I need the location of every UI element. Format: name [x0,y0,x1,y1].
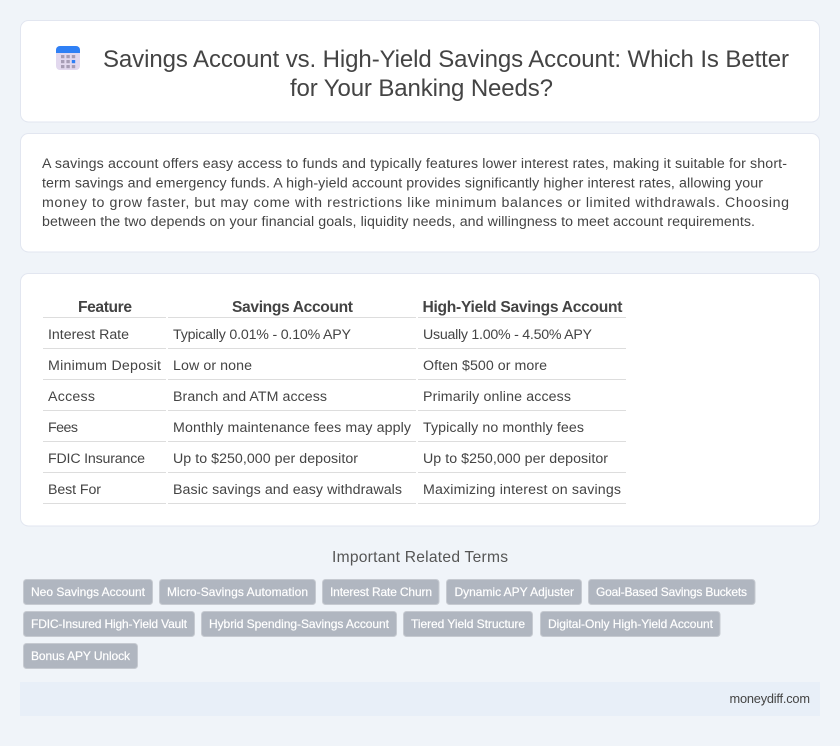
text block: intro paragraph: between the two depends on your financial goals, liquidity needs, and willingness to meet account requirements. [42,214,755,230]
row: FDIC insurance [48,451,608,467]
row: fees [48,420,584,436]
table header: Savings Account [232,299,353,316]
row: fees: Fees [48,420,78,436]
row: access: Primarily online access [423,389,571,405]
tag [24,580,152,604]
tag [24,644,138,668]
row: FDIC insurance: Up to $250,000 per depositor [423,451,608,467]
table header: High-Yield Savings Account [422,299,622,316]
footer [20,682,820,716]
row: access: Branch and ATM access [173,389,327,405]
tag [160,580,316,604]
row: fees: Monthly maintenance fees may apply [173,420,412,436]
heading: important related terms: Important Related Terms [332,549,508,566]
row: interest rate: Interest Rate [48,327,129,343]
tag [588,580,755,604]
title [103,46,789,102]
row: minimum deposit: Low or none [173,358,252,374]
tag [24,612,194,636]
tag: FDIC-Insured High-Yield Vault [31,617,188,631]
title: Savings Account vs. High-Yield Savings Account: Which Is Better [103,46,789,73]
tag [404,612,532,636]
row: minimum deposit [48,358,547,374]
tag: Digital-Only High-Yield Account [548,617,714,631]
panel: introduction [20,134,820,252]
row: interest rate [48,327,593,343]
row: access [48,389,571,405]
tag: Neo Savings Account [31,585,146,599]
tag [446,580,582,604]
tag: Dynamic APY Adjuster [454,585,574,599]
footer: moneydiff.com [730,691,810,706]
tag: Bonus APY Unlock [31,649,131,663]
tag [540,612,720,636]
row: FDIC insurance: Up to $250,000 per depositor [173,451,358,467]
tag: Tiered Yield Structure [411,617,525,631]
row: best for [48,482,621,498]
row: best for: Best For [48,482,101,498]
row: FDIC insurance: FDIC Insurance [48,451,145,467]
row: interest rate: Typically 0.01% - 0.10% APY [173,327,352,343]
row: interest rate: Usually 1.00% - 4.50% APY [423,327,593,343]
table header: Feature [78,299,132,316]
row: best for: Basic savings and easy withdrawals [173,482,402,498]
tag: Goal-Based Savings Buckets [596,585,747,599]
panel: comparison table [20,274,820,526]
row: access: Access [48,389,95,405]
row: best for: Maximizing interest on savings [423,482,621,498]
tag: Hybrid Spending-Savings Account [209,617,390,631]
tag [202,612,396,636]
title: for Your Banking Needs? [290,75,553,102]
text block: intro paragraph: A savings account offers easy access to funds and typically features lower interest rates, making it suitable for short- [42,156,787,172]
icon: calendar [56,46,80,70]
tag: Interest Rate Churn [330,585,432,599]
tags: related terms [24,580,755,668]
row: fees: Typically no monthly fees [423,420,584,436]
text block: intro paragraph: money to grow faster, but may come with restrictions like minimum balances or limited withdrawals. Choosing [42,195,789,211]
text block: intro paragraph [42,156,789,230]
row: minimum deposit: Often $500 or more [423,358,547,374]
text block: intro paragraph: term savings and emergency funds. A high-yield account provides significantly higher interest rates, allowing your [42,176,763,192]
tag: Micro-Savings Automation [167,585,308,599]
panel: title header [20,20,820,122]
tag [322,580,439,604]
row: minimum deposit: Minimum Deposit [48,358,161,374]
table header [78,299,622,316]
